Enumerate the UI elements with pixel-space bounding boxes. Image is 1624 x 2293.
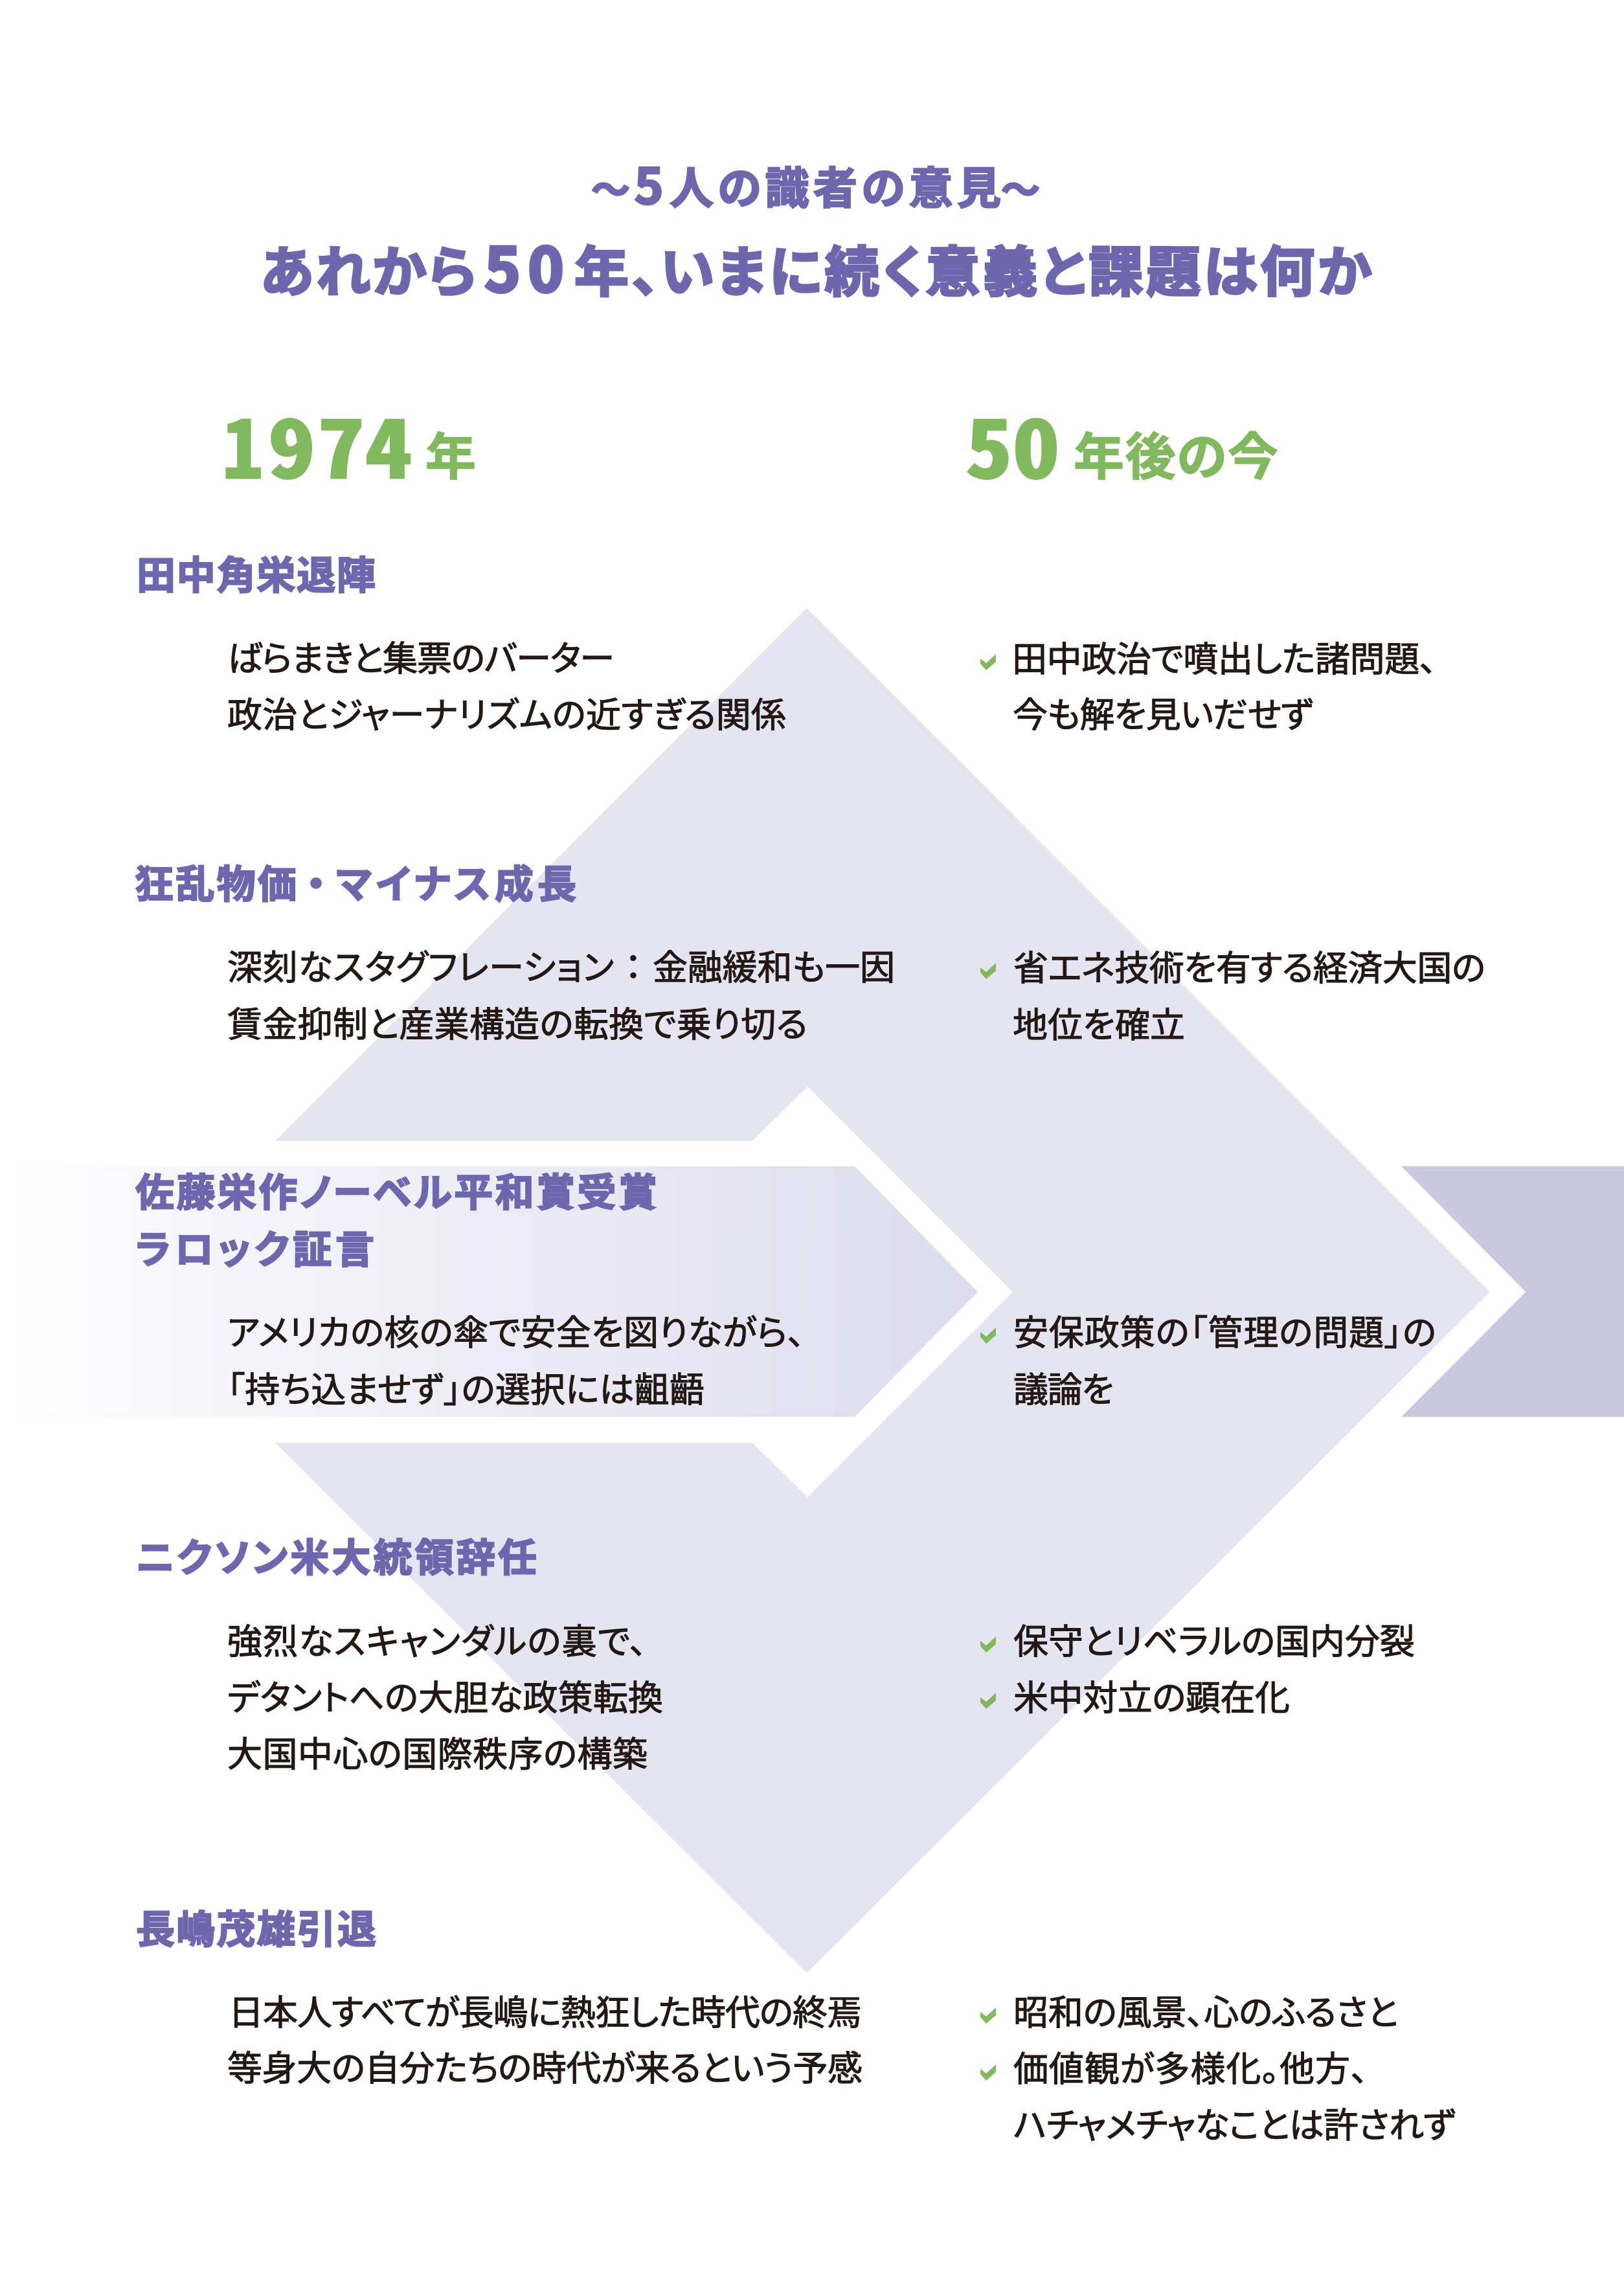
title: あれから (260, 229, 476, 308)
section 3 heading: ラロック証言 (135, 1219, 374, 1275)
right arrow band (1401, 1166, 1624, 1417)
section 1 left text: ばらまきと集票のバーター (227, 630, 615, 681)
section 4 heading: ニクソン米大統領辞任 (136, 1527, 537, 1583)
section 4 left text (227, 1613, 663, 1777)
column heading: 1974: 年 (425, 417, 476, 490)
section 2 left text: 金融緩和も一因 (653, 939, 895, 990)
section 4 left text: 強烈なスキャンダルの裏で、 (227, 1613, 647, 1664)
section 2 right text: 省エネ技術を有する経済大国の (1013, 940, 1485, 991)
section 3 left text (227, 1304, 805, 1412)
section 4 right text: 保守とリベラルの国内分裂 (1013, 1613, 1415, 1664)
section 1 right text (980, 631, 1437, 738)
subtitle (591, 147, 1040, 218)
section 2 heading: マイナス成長 (336, 853, 576, 910)
section 2 heading: 狂乱物価 (135, 853, 297, 910)
title: 、 (632, 229, 659, 308)
section 3 left text: アメリカの核の傘で安全を図りながら、 (227, 1304, 805, 1355)
section 4 right text (980, 1613, 1415, 1721)
column heading: 50 years later: 5 (965, 385, 1012, 501)
section 2 right text (980, 940, 1485, 1048)
title: 50 (485, 221, 563, 309)
section 1 left text: 政治とジャーナリズムの近すぎる関係 (227, 686, 786, 738)
section 1 right text: 今も解を見いだせず (1013, 686, 1313, 738)
diamond arrow background (275, 608, 1490, 1973)
section 3 left text: 「持ち込ませず」の選択には齟齬 (227, 1361, 705, 1412)
subtitle: 5 (635, 147, 663, 218)
column heading: 1974: 9 (268, 385, 315, 501)
section 4 right text: 米中対立の顕在化 (1013, 1669, 1290, 1721)
section 3 right text: 安保政策の「管理の問題」の (1013, 1304, 1436, 1355)
section 5 left text: 日本人すべてが長嶋に熱狂した時代の終焉 (229, 1984, 862, 2035)
section 1 left text (227, 630, 786, 738)
section 1 heading: 田中角栄退陣 (137, 545, 376, 601)
section 2 right text: 地位を確立 (1013, 997, 1185, 1048)
section 5 left text (227, 1984, 863, 2091)
section 3 heading: 佐藤栄作ノーベル平和賞受賞 (135, 1162, 657, 1218)
section 5 heading: 長嶋茂雄引退 (136, 1899, 376, 1955)
section 5 left text: 等身大の自分たちの時代が来るという予感 (227, 2040, 863, 2091)
column heading: 50 years later: 0 (1013, 385, 1059, 501)
section 4 left text: デタントへの大胆な政策転換 (227, 1669, 663, 1721)
column heading: 50 years later: 年後の今 (1074, 417, 1278, 490)
section 2 left text: ： (616, 939, 651, 990)
section 5 right text: ハチャメチャなことは許されず (1013, 2097, 1456, 2148)
section 5 right text: 昭和の風景、心のふるさと (1013, 1984, 1398, 2035)
column heading: 50 years later (965, 385, 1278, 501)
section 2 left text: 深刻なスタグフレーション (227, 939, 614, 990)
title: 年 (574, 229, 629, 308)
section 3 heading (135, 1162, 657, 1275)
section 2 heading (135, 853, 576, 910)
column heading: 1974: 7 (318, 385, 365, 501)
section 3 right text (980, 1304, 1436, 1412)
subtitle: 人の識者の意見 (670, 153, 1001, 217)
section 2 left text: 賃金抑制と産業構造の転換で乗り切る (227, 996, 807, 1047)
column heading: 1974: 4 (365, 385, 412, 501)
subtitle: ～ (591, 159, 630, 216)
section 2 heading: ・ (297, 853, 335, 910)
title: いまに続く意義と課題は何か (660, 229, 1371, 308)
section 4 left text: 大国中心の国際秩序の構築 (227, 1726, 648, 1777)
section 5 right text: 価値観が多様化。他方、 (1013, 2040, 1368, 2092)
subtitle: ～ (1001, 159, 1040, 216)
title (260, 221, 1371, 309)
section 5 right text (980, 1984, 1456, 2148)
column heading: 1974 (223, 385, 476, 501)
section 2 left text (227, 939, 895, 1047)
section 3 right text: 議論を (1013, 1361, 1114, 1412)
middle gradient arrow band (0, 1166, 978, 1417)
column heading: 1974: 1 (223, 385, 263, 501)
section 1 right text: 田中政治で噴出した諸問題、 (1012, 631, 1437, 682)
